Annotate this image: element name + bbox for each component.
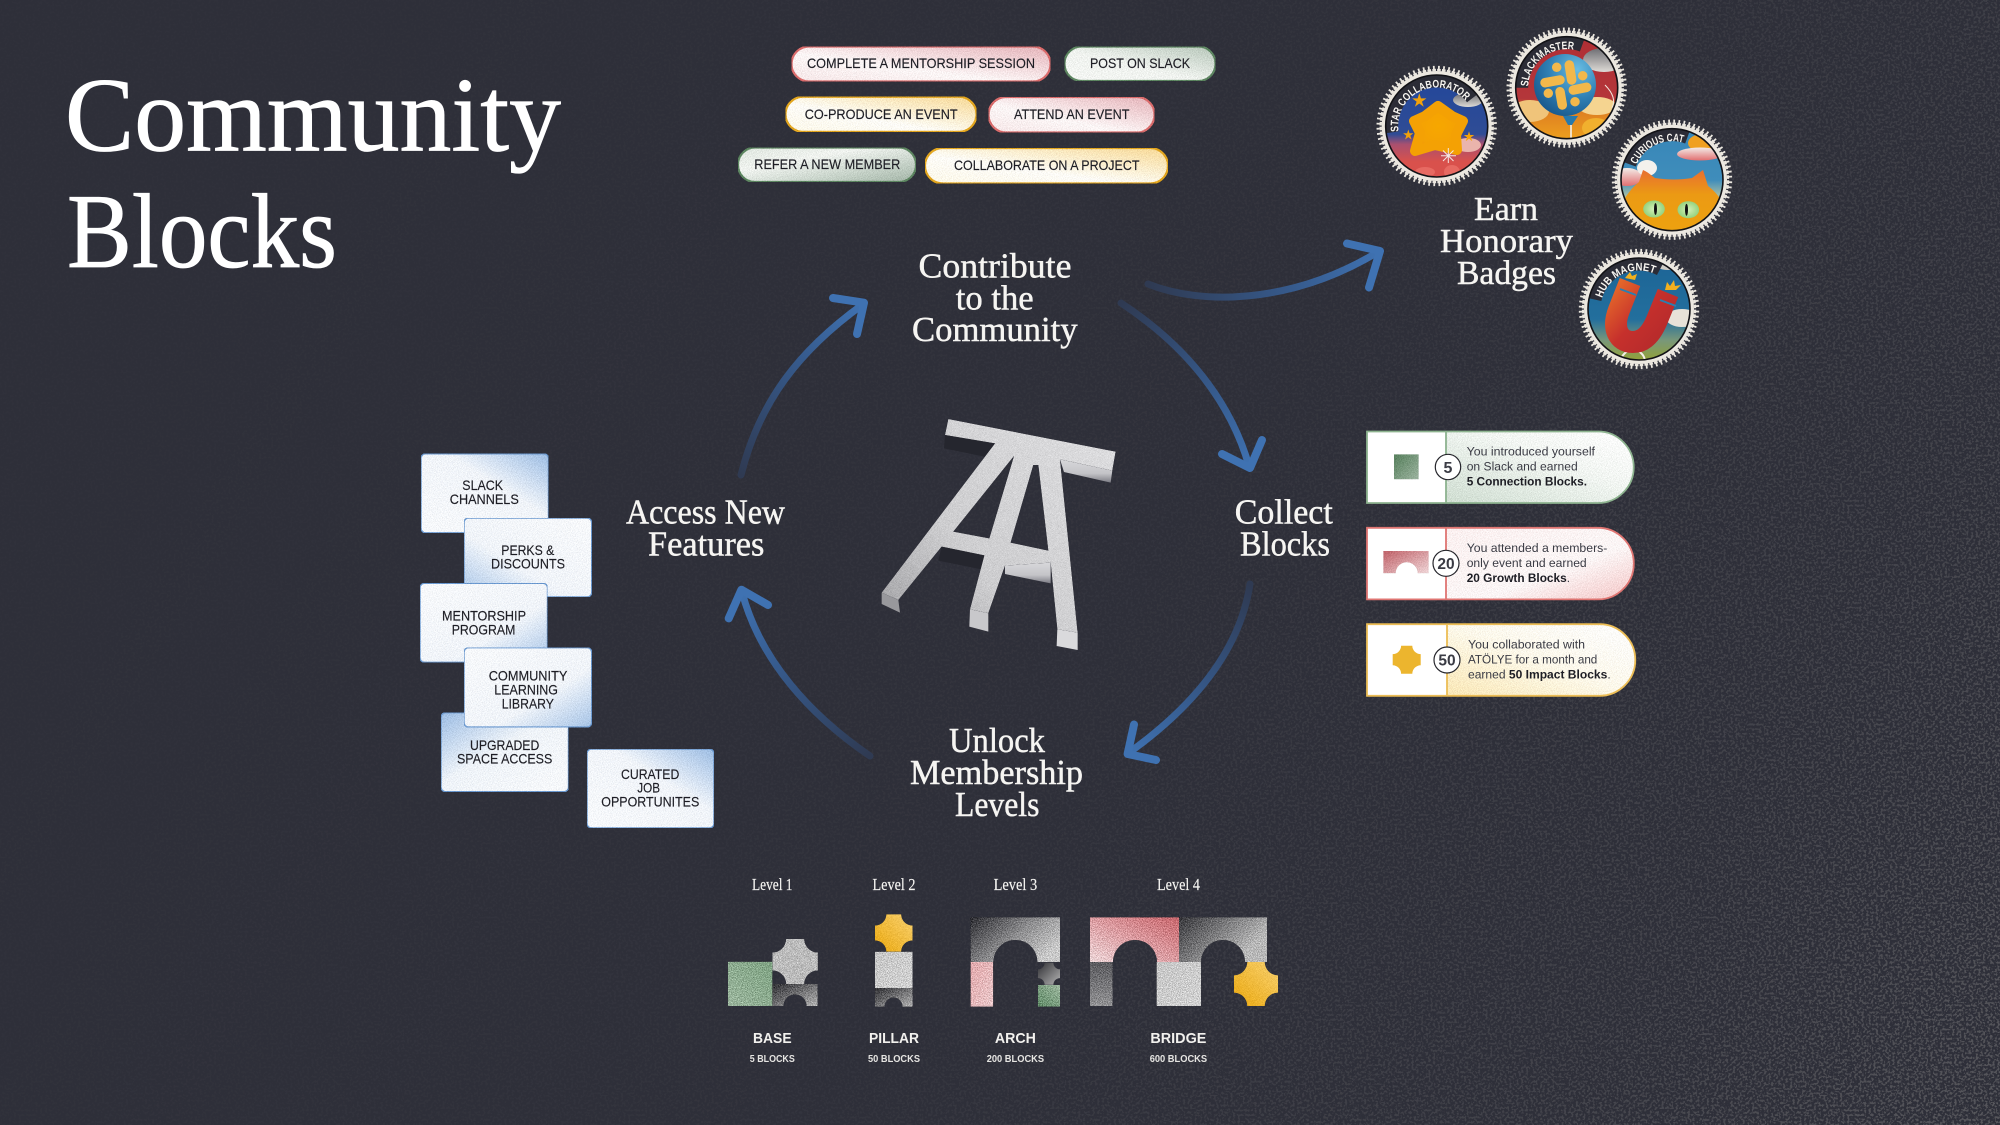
- blocks: base: [728, 939, 818, 1006]
- level 1: base: [728, 875, 818, 1065]
- pill: complete a mentorship session: [792, 46, 1050, 82]
- pill: refer a new member: [738, 148, 916, 182]
- heading: contribute to the community: Contribute: [918, 246, 1072, 286]
- pill: attend an event: ATTEND AN EVENT: [1014, 106, 1130, 122]
- level 3: arch: 200 BLOCKS: [987, 1054, 1044, 1065]
- panel: membership levels: [728, 875, 1278, 1065]
- level 3: arch: ARCH: [995, 1030, 1036, 1047]
- card: 20 growth blocks: 20 Growth Blocks.: [1467, 571, 1570, 585]
- card: slack channels: CHANNELS: [450, 492, 519, 507]
- card: 5 connection blocks: 5 Connection Blocks.: [1467, 475, 1587, 489]
- level 4: bridge: [1090, 875, 1278, 1065]
- card: 50 impact blocks: You collaborated with: [1468, 638, 1585, 652]
- panel: honorary badges: [1376, 28, 1732, 370]
- heading: access new features: Access New: [626, 492, 786, 532]
- heading: collect blocks: Collect: [1235, 492, 1333, 532]
- card: curated job opportunities: [587, 749, 714, 828]
- card: perks and discounts: DISCOUNTS: [491, 557, 565, 572]
- badge: slackmaster: [1506, 28, 1627, 148]
- card: upgraded space access: UPGRADED: [470, 738, 539, 753]
- panel: cycle: [626, 244, 1380, 824]
- heading: access new features: Features: [648, 524, 764, 564]
- card: community learning library: LIBRARY: [502, 697, 554, 712]
- level 4: bridge: BRIDGE: [1150, 1030, 1206, 1047]
- card: community learning library: COMMUNITY: [489, 669, 567, 684]
- card: 5 connection blocks: You introduced yourself: [1467, 444, 1596, 458]
- card: 5 connection blocks: [1367, 432, 1634, 503]
- heading: earn honorary badges: [1440, 191, 1573, 292]
- title: Community: [65, 56, 561, 174]
- badge: curious cat: CURIOUS CAT: [1630, 134, 1684, 164]
- level 3: arch: Level 3: [994, 875, 1037, 894]
- heading: unlock membership levels: Membership: [910, 753, 1083, 792]
- level 2: pillar: Level 2: [872, 875, 916, 894]
- arrow: contribute to collect: [1121, 303, 1262, 468]
- card: community learning library: LEARNING: [494, 683, 558, 698]
- pill: attend an event: [988, 97, 1154, 132]
- arrow: to badges: [1148, 244, 1380, 297]
- heading: collect blocks: Blocks: [1240, 524, 1330, 564]
- badge: curious cat: [1612, 120, 1732, 240]
- badge: star collaborator: [1376, 66, 1497, 186]
- heading: earn honorary badges: Badges: [1457, 255, 1556, 292]
- level 1: base: Level 1: [752, 875, 792, 894]
- card: 20 growth blocks: 20: [1437, 556, 1455, 573]
- pill: complete a mentorship session: COMPLETE A MENTORSHIP SESSION: [807, 55, 1035, 71]
- heading: contribute to the community: Community: [912, 310, 1078, 349]
- background: [976, 0, 2000, 1125]
- card: mentorship program: [420, 583, 548, 662]
- heading: earn honorary badges: Honorary: [1440, 223, 1573, 260]
- heading: collect blocks: [1235, 492, 1333, 564]
- level 4: bridge: Level 4: [1157, 875, 1200, 894]
- card: mentorship program: PROGRAM: [452, 622, 515, 637]
- panel: collect blocks cards: [1367, 432, 1635, 696]
- card: perks and discounts: PERKS &: [501, 543, 554, 558]
- blocks: arch: [971, 917, 1060, 1007]
- card: 5 connection blocks: 5: [1444, 460, 1453, 477]
- heading: unlock membership levels: [910, 721, 1083, 824]
- level 2: pillar: PILLAR: [869, 1030, 919, 1047]
- pill: collaborate on a project: [925, 148, 1168, 184]
- card: slack channels: SLACK: [462, 478, 503, 493]
- heading: contribute to the community: [912, 246, 1078, 349]
- pill: co-produce an event: CO-PRODUCE AN EVENT: [805, 106, 958, 122]
- arrow: access to contribute: [741, 298, 864, 475]
- panel: new features cards: [420, 454, 714, 828]
- card: mentorship program: MENTORSHIP: [442, 608, 526, 623]
- card: upgraded space access: [441, 713, 568, 792]
- card: 20 growth blocks: You attended a members-: [1467, 541, 1607, 555]
- blocks: bridge: [1090, 917, 1278, 1006]
- panel: contribution pills: [738, 46, 1216, 184]
- card: curated job opportunities: OPPORTUNITES: [601, 795, 699, 810]
- card: 5 connection blocks: on Slack and earned: [1467, 459, 1578, 473]
- pill: post on slack: POST ON SLACK: [1090, 55, 1191, 71]
- icon: 3d atolye logo: [882, 419, 1116, 650]
- level 1: base: BASE: [753, 1030, 792, 1047]
- heading: contribute to the community: to the: [956, 278, 1034, 317]
- pill: post on slack: [1064, 46, 1216, 81]
- card: 20 growth blocks: only event and earned: [1467, 556, 1587, 570]
- badge: hub magnet: [1578, 248, 1700, 370]
- card: curated job opportunities: JOB: [637, 781, 660, 796]
- card: 50 impact blocks: 50: [1438, 653, 1456, 670]
- pill: collaborate on a project: COLLABORATE ON A PROJECT: [954, 157, 1140, 173]
- level 2: pillar: [868, 875, 920, 1065]
- level 3: arch: [971, 875, 1060, 1065]
- pill: co-produce an event: [786, 97, 976, 132]
- heading: earn honorary badges: Earn: [1474, 191, 1538, 228]
- card: upgraded space access: SPACE ACCESS: [457, 752, 552, 767]
- card: community learning library: [464, 648, 592, 727]
- card: 50 impact blocks: earned 50 Impact Blocks.: [1468, 668, 1611, 682]
- badge: hub magnet: HUB MAGNET: [1595, 262, 1657, 298]
- heading: access new features: [626, 492, 786, 564]
- title: [65, 56, 561, 290]
- blocks: pillar: [875, 914, 912, 1007]
- card: 20 growth blocks: [1367, 528, 1634, 599]
- card: slack channels: [421, 454, 548, 533]
- heading: unlock membership levels: Unlock: [949, 721, 1045, 760]
- level 2: pillar: 50 BLOCKS: [868, 1054, 920, 1065]
- badge: slackmaster: SLACKMASTER: [1520, 42, 1574, 86]
- level 1: base: 5 BLOCKS: [750, 1054, 795, 1065]
- card: 50 impact blocks: ATÖLYE for a month and: [1468, 653, 1597, 667]
- pill: refer a new member: REFER A NEW MEMBER: [754, 156, 900, 172]
- arrow: unlock to access: [729, 590, 870, 756]
- level 4: bridge: 600 BLOCKS: [1150, 1054, 1207, 1065]
- card: curated job opportunities: CURATED: [621, 767, 679, 782]
- heading: unlock membership levels: Levels: [955, 785, 1039, 824]
- card: 50 impact blocks: [1367, 624, 1635, 696]
- card: perks and discounts: [464, 518, 592, 597]
- title: Blocks: [67, 173, 337, 290]
- arrow: collect to unlock: [1128, 584, 1250, 760]
- badge: star collaborator: STAR COLLABORATOR: [1390, 80, 1470, 132]
